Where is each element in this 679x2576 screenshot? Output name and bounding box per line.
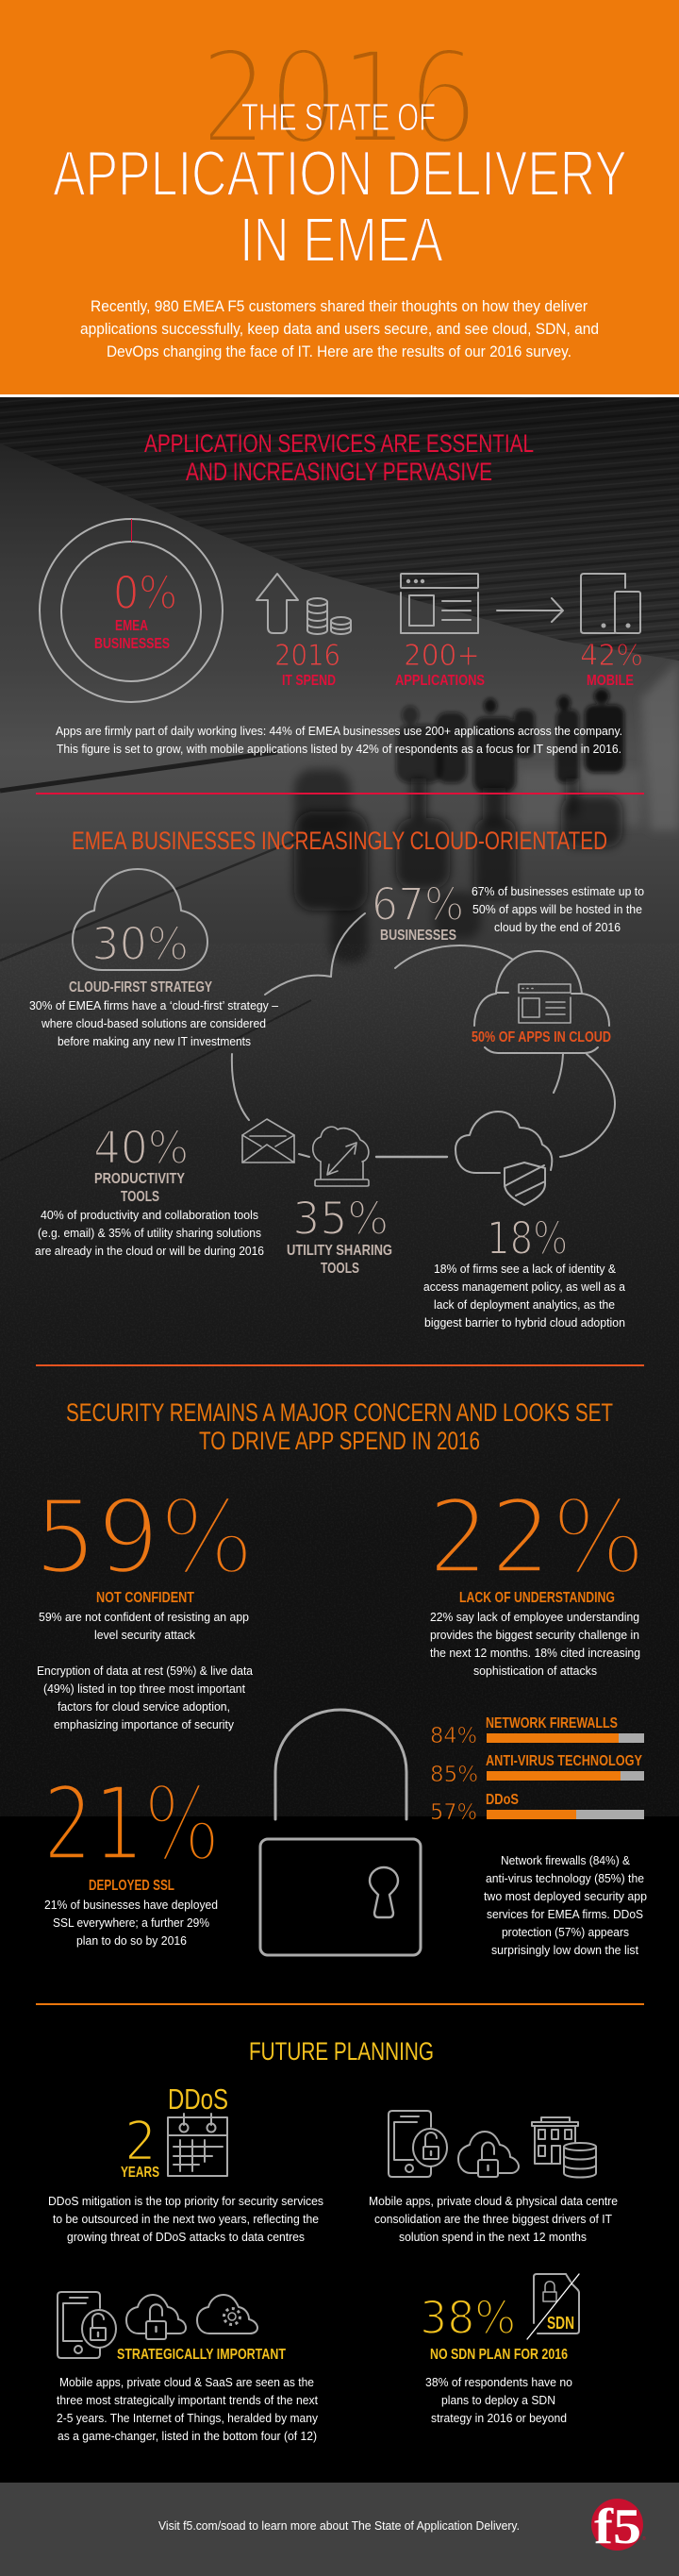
icon: crossed-out SDN document bbox=[527, 2274, 579, 2339]
intro text: applications successfully, keep data and users secure, and see cloud, SDN, and bbox=[80, 321, 599, 338]
stat: 22% lack of understanding: 22% bbox=[427, 1477, 645, 1597]
cloud-first stat: 30% bbox=[91, 918, 189, 971]
stat: 42% mobile: MOBILE bbox=[587, 673, 634, 689]
title bbox=[53, 95, 627, 276]
productivity tools stat: (e.g. email) & 35% of utility sharing solutions bbox=[38, 1226, 261, 1240]
heading: application services bbox=[144, 429, 534, 486]
heading: security bbox=[66, 1398, 613, 1455]
strategically important item: as a game-changer, listed in the bottom four (of 12) bbox=[58, 2429, 317, 2443]
ring chart: 0% EMEA businesses: EMEA bbox=[115, 618, 148, 634]
DDoS priority item: YEARS bbox=[121, 2165, 159, 2181]
bar chart: deployed security app services bbox=[430, 1715, 644, 1825]
text block: network firewalls bbox=[484, 1853, 647, 1957]
stat: 200+ applications bbox=[395, 639, 485, 689]
18% stat: lack of deployment analytics, as the bbox=[434, 1297, 615, 1312]
title: THE STATE OF bbox=[241, 95, 436, 139]
icon: cloud with shield bbox=[455, 1112, 552, 1205]
ring chart: 0% EMEA businesses bbox=[40, 519, 223, 702]
icon: cloud with gear bbox=[197, 2295, 257, 2333]
intro text bbox=[80, 298, 599, 360]
icon: phone with lock bbox=[58, 2292, 116, 2358]
productivity tools stat bbox=[35, 1122, 264, 1258]
50% of apps in cloud: 50% OF APPS IN CLOUD bbox=[472, 1029, 611, 1045]
stat: 42% mobile bbox=[580, 639, 643, 689]
utility sharing tools stat: 35% bbox=[292, 1193, 389, 1246]
cloud-first stat: 30% of EMEA firms have a ‘cloud-first’ strategy – bbox=[29, 998, 279, 1012]
businesses stat: 67% of businesses estimate up to bbox=[472, 884, 644, 898]
utility sharing tools stat: UTILITY SHARING bbox=[287, 1243, 392, 1259]
icon: cloud with lock bbox=[126, 2295, 186, 2339]
utility sharing tools stat: TOOLS bbox=[321, 1261, 359, 1277]
intro text: DevOps changing the face of IT. Here are the results of our 2016 survey. bbox=[107, 343, 571, 360]
footer text: Visit f5.com/soad to learn more about The State of Application Delivery. bbox=[158, 2518, 520, 2533]
stat: 59% not confident: (49%) listed in top three most important bbox=[43, 1681, 245, 1696]
cloud-first stat: where cloud-based solutions are considered bbox=[41, 1016, 266, 1030]
text block: network firewalls: two most deployed security app bbox=[484, 1889, 647, 1903]
background photo: concourse with commuters bbox=[0, 397, 679, 1816]
heading: application services: APPLICATION SERVICES ARE ESSENTIAL bbox=[144, 429, 534, 458]
panel: cloud-orientated bbox=[29, 827, 644, 1366]
bar: DDoS: 57% bbox=[430, 1800, 477, 1825]
productivity tools stat: are already in the cloud or will be during 2016 bbox=[35, 1244, 264, 1258]
bar: anti-virus technology: 85% bbox=[430, 1763, 478, 1787]
stat: 22% lack of understanding: sophistication of attacks bbox=[473, 1664, 597, 1678]
businesses stat: 50% of apps will be hosted in the bbox=[472, 902, 642, 916]
stat: 59% not confident: 59% are not confident of resisting an app bbox=[39, 1610, 249, 1624]
header panel bbox=[0, 0, 679, 397]
stat: 59% not confident: factors for cloud service adoption, bbox=[58, 1699, 230, 1714]
18% stat: 18% bbox=[487, 1213, 568, 1265]
heading: application services: AND INCREASINGLY PERVASIVE bbox=[186, 458, 492, 486]
heading: security: TO DRIVE APP SPEND IN 2016 bbox=[199, 1427, 480, 1455]
intro text: Recently, 980 EMEA F5 customers shared their thoughts on how they deliver bbox=[91, 298, 588, 315]
stat: 22% lack of understanding bbox=[427, 1477, 645, 1678]
text block: network firewalls: anti-virus technology (85%) the bbox=[486, 1871, 644, 1885]
bar: DDoS: DDoS bbox=[486, 1792, 519, 1808]
bar: anti-virus technology bbox=[430, 1753, 644, 1787]
stat: 22% lack of understanding: the next 12 months. 18% cited increasing bbox=[430, 1646, 640, 1660]
icon: padlock bbox=[260, 1710, 421, 1955]
icon: laptop cloud with sharing arrow bbox=[313, 1127, 369, 1186]
no SDN plan item bbox=[420, 2274, 579, 2425]
logo: f5: f5 bbox=[594, 2500, 641, 2554]
text block: network firewalls: protection (57%) appears bbox=[502, 1925, 629, 1939]
arrow bbox=[497, 598, 563, 622]
stat: 21% deployed SSL: 21% bbox=[42, 1764, 220, 1884]
panel: security bbox=[34, 1398, 647, 2005]
bar: DDoS bbox=[430, 1792, 644, 1825]
no SDN plan item: SDN bbox=[547, 2314, 574, 2333]
text block: network firewalls: Network firewalls (84%) & bbox=[501, 1853, 630, 1867]
stat: 59% not confident bbox=[34, 1477, 254, 1731]
cloud-first stat bbox=[29, 869, 279, 1048]
strategically important item: STRATEGICALLY IMPORTANT bbox=[117, 2347, 286, 2363]
text block: apps in daily working lives: This figure is set to grow, with mobile applications listed by 42% of respondents as a focus for IT spend in 2016. bbox=[57, 742, 621, 756]
bar: network firewalls bbox=[430, 1715, 644, 1748]
DDoS priority item: to be outsourced in the next two years, reflecting the bbox=[53, 2212, 319, 2226]
stat: 21% deployed SSL bbox=[42, 1764, 220, 1948]
stat: 21% deployed SSL: DEPLOYED SSL bbox=[89, 1878, 174, 1894]
stat: 2016 IT spend bbox=[274, 639, 340, 689]
bar: network firewalls: NETWORK FIREWALLS bbox=[486, 1715, 618, 1731]
no SDN plan item: 38% of respondents have no bbox=[425, 2375, 572, 2389]
IT solution spend item bbox=[369, 2111, 618, 2244]
faint year 2016: 2016 bbox=[199, 22, 478, 175]
panel: future planning bbox=[48, 2037, 618, 2443]
stat: 22% lack of understanding: provides the biggest security challenge in bbox=[430, 1628, 639, 1642]
18% stat: 18% of firms see a lack of identity & bbox=[434, 1262, 616, 1276]
logo: f5: ® bbox=[642, 2535, 646, 2542]
businesses stat: BUSINESSES bbox=[380, 928, 456, 944]
stat: 22% lack of understanding: 22% say lack of employee understanding bbox=[430, 1610, 639, 1624]
no SDN plan item: NO SDN PLAN FOR 2016 bbox=[430, 2347, 568, 2363]
DDoS priority item: 2 bbox=[124, 2109, 157, 2173]
icon: application browser window bbox=[401, 574, 478, 633]
18% stat: biggest barrier to hybrid cloud adoption bbox=[424, 1315, 625, 1330]
IT solution spend item: solution spend in the next 12 months bbox=[399, 2230, 587, 2244]
ring chart: 0% EMEA businesses: BUSINESSES bbox=[94, 636, 170, 652]
stat: 59% not confident: Encryption of data at rest (59%) & live data bbox=[37, 1664, 254, 1678]
icon: cloud bbox=[73, 869, 207, 970]
no SDN plan item: plans to deploy a SDN bbox=[441, 2393, 555, 2407]
strategically important item: 2-5 years. The Internet of Things, heralded by many bbox=[57, 2411, 318, 2425]
businesses stat bbox=[372, 878, 644, 944]
businesses stat: cloud by the end of 2016 bbox=[494, 920, 621, 934]
text block: network firewalls: surprisingly low down the list bbox=[491, 1943, 638, 1957]
icon: envelope bbox=[242, 1119, 294, 1163]
icon: building and database bbox=[532, 2117, 596, 2178]
bar: anti-virus technology: ANTI-VIRUS TECHNOLOGY bbox=[486, 1753, 642, 1769]
text block: apps in daily working lives bbox=[56, 724, 622, 756]
cloud-first stat: CLOUD-FIRST STRATEGY bbox=[69, 979, 212, 995]
stat: 22% lack of understanding: LACK OF UNDERSTANDING bbox=[459, 1590, 615, 1606]
strategically important item: Mobile apps, private cloud & SaaS are seen as the bbox=[59, 2375, 314, 2389]
strategically important item: three most strategically important trends of the next bbox=[57, 2393, 318, 2407]
stat: 42% mobile: 42% bbox=[580, 639, 643, 673]
stat: 21% deployed SSL: plan to do so by 2016 bbox=[76, 1933, 187, 1948]
ring chart: 0% EMEA businesses: 0% bbox=[113, 567, 177, 620]
DDoS priority item bbox=[48, 2083, 323, 2244]
IT solution spend item: Mobile apps, private cloud & physical data centre bbox=[369, 2194, 618, 2208]
utility sharing tools stat bbox=[287, 1193, 392, 1277]
stat: 59% not confident: level security attack bbox=[94, 1628, 195, 1642]
18% stat bbox=[423, 1213, 626, 1330]
panel: application services bbox=[36, 429, 644, 795]
DDoS priority item: DDoS bbox=[168, 2083, 228, 2116]
stat: 200+ applications: APPLICATIONS bbox=[395, 673, 485, 689]
productivity tools stat: TOOLS bbox=[121, 1189, 159, 1205]
footer bbox=[0, 2483, 679, 2576]
text block: apps in daily working lives: Apps are firmly part of daily working lives: 44% of EMEA businesses use 200+ applications across the company. bbox=[56, 724, 622, 738]
productivity tools stat: 40% of productivity and collaboration tools bbox=[41, 1208, 258, 1222]
icon: cloud with browser bbox=[474, 951, 609, 1053]
productivity tools stat: 40% bbox=[93, 1122, 189, 1175]
productivity tools stat: PRODUCTIVITY bbox=[94, 1171, 185, 1187]
stat: 2016 IT spend: 2016 bbox=[274, 639, 340, 673]
stat: 2016 IT spend: IT SPEND bbox=[282, 673, 336, 689]
18% stat: access management policy, as well as a bbox=[423, 1280, 626, 1294]
DDoS priority item: growing threat of DDoS attacks to data centres bbox=[67, 2230, 305, 2244]
stat: 59% not confident: emphasizing importance of security bbox=[54, 1717, 234, 1731]
text block: network firewalls: services for EMEA firms. DDoS bbox=[487, 1907, 643, 1921]
stat: 21% deployed SSL: SSL everywhere; a further 29% bbox=[53, 1915, 209, 1930]
cloud-first stat: before making any new IT investments bbox=[58, 1034, 251, 1048]
stat: 200+ applications: 200+ bbox=[404, 639, 480, 673]
icon: up arrow and coins bbox=[257, 574, 351, 634]
icon: phone with lock bbox=[389, 2111, 447, 2177]
stat: 59% not confident: 59% bbox=[34, 1477, 254, 1597]
stat: 21% deployed SSL: 21% of businesses have deployed bbox=[44, 1898, 218, 1912]
no SDN plan item: strategy in 2016 or beyond bbox=[431, 2411, 567, 2425]
heading: future planning: FUTURE PLANNING bbox=[249, 2037, 434, 2066]
title: IN EMEA bbox=[240, 205, 443, 276]
IT solution spend item: consolidation are the three biggest drivers of IT bbox=[374, 2212, 612, 2226]
icon: connecting cloud ring bbox=[232, 913, 615, 1157]
no SDN plan item: 38% bbox=[420, 2292, 516, 2345]
50% of apps in cloud bbox=[472, 951, 611, 1053]
stat: 59% not confident: NOT CONFIDENT bbox=[96, 1590, 194, 1606]
DDoS priority item: DDoS mitigation is the top priority for security services bbox=[48, 2194, 323, 2208]
icon: calendar bbox=[168, 2114, 227, 2176]
icon: cloud with lock bbox=[458, 2132, 519, 2177]
businesses stat: 67% bbox=[372, 878, 464, 931]
bar: network firewalls: 84% bbox=[430, 1724, 477, 1748]
strategically important item bbox=[57, 2292, 318, 2443]
icon: tablet and phone bbox=[581, 574, 640, 633]
